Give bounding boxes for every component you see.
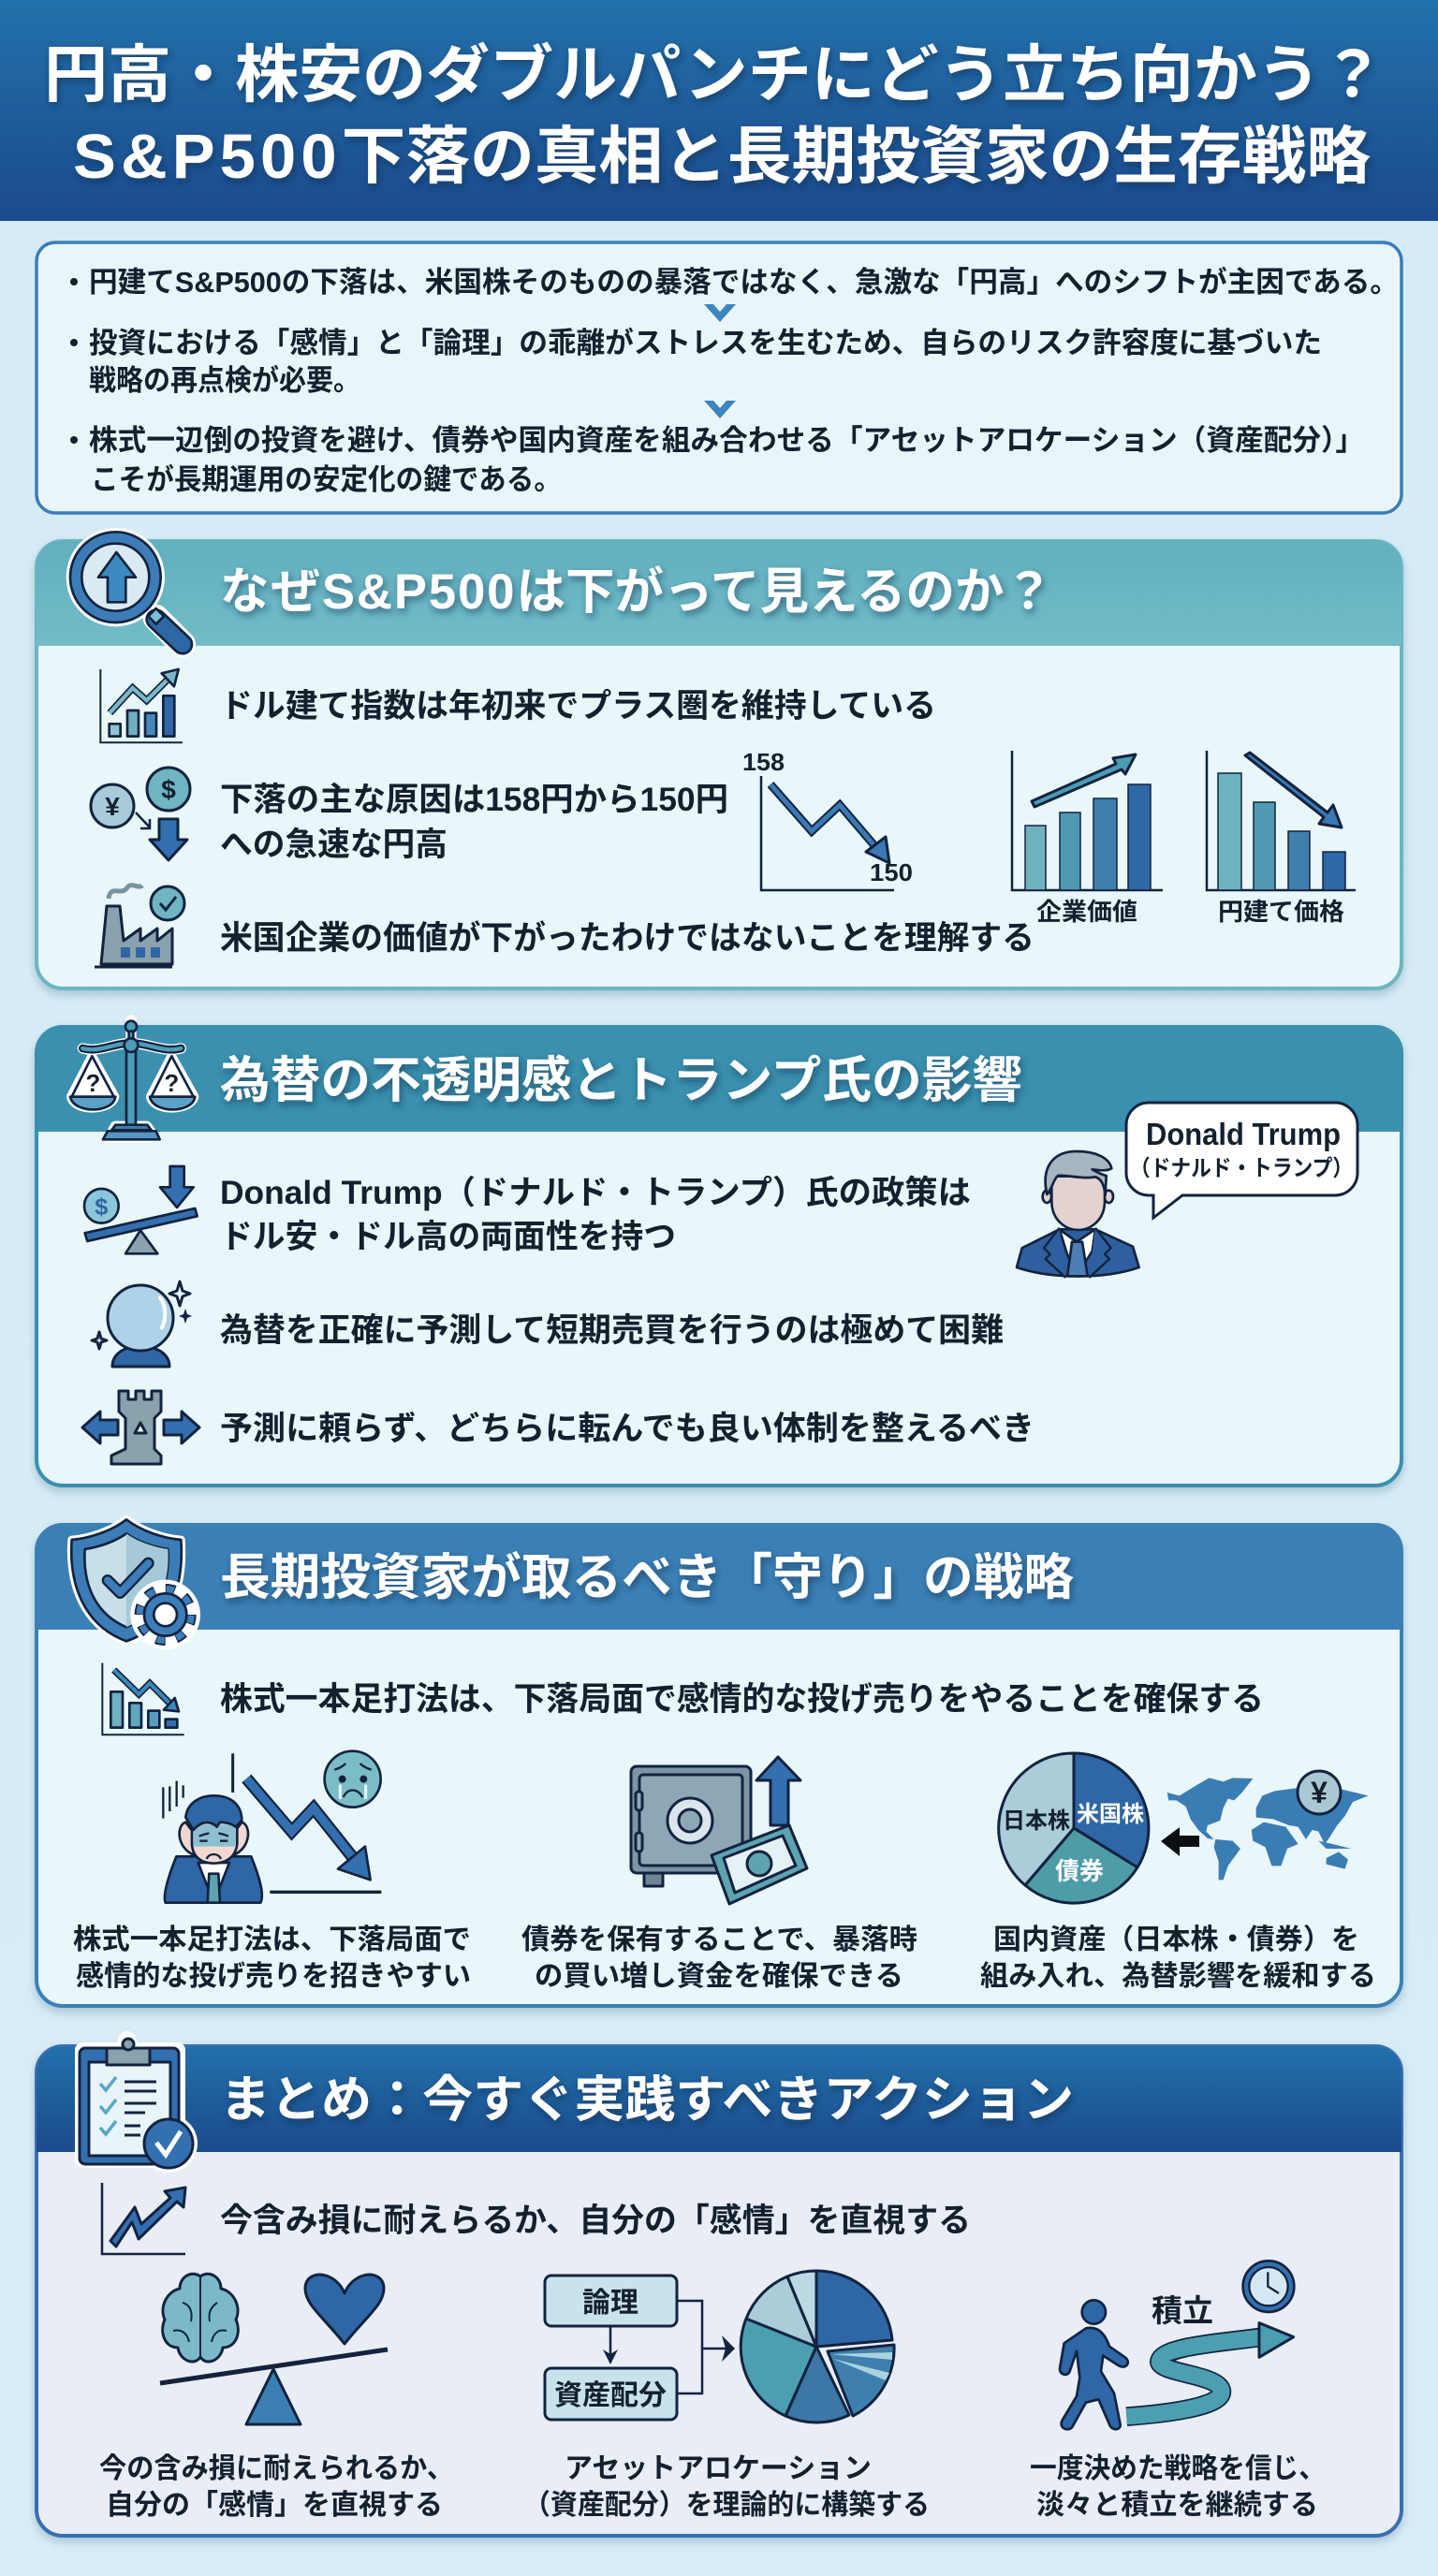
chart: yen-denominated price: 円建て価格	[1218, 898, 1344, 926]
row: difficult forecast	[92, 1281, 1004, 1367]
chart: USD/JPY 158 to 150	[742, 748, 913, 890]
summary point 3: 株式一辺倒の投資を避け、債券や国内資産を組み合わせる「アセットアロケーション（資産配分）」	[89, 424, 1364, 457]
caption: single-stock risk: 感情的な投げ売りを招きやすい	[76, 1961, 471, 1992]
caption: emotions: 自分の「感情」を直視する	[106, 2490, 443, 2521]
title: 円高・株安のダブルパンチにどう立ち向かう？	[44, 40, 1385, 110]
caption: keep investing: 一度決めた戦略を信じ、	[1030, 2453, 1326, 2484]
row: difficult forecast: 為替を正確に予測して短期売買を行うのは極めて困難	[220, 1312, 1004, 1349]
chart: yen-denominated price	[1207, 751, 1356, 926]
row: prepare for both: 予測に頼らず、どちらに転んでも良い体制を整えるべき	[220, 1411, 1034, 1447]
caption: emotions: 今の含み損に耐えられるか、	[99, 2453, 454, 2484]
heading: なぜS&P500は下がって見えるのか？	[220, 564, 1053, 620]
callout: Donald Trump speech bubble: Donald Trump	[1146, 1117, 1341, 1151]
row: Trump policy: Donald Trump（ドナルド・トランプ）氏の政策は	[220, 1175, 971, 1211]
summary point 2: 戦略の再点検が必要。	[89, 364, 360, 397]
caption: keep investing	[1030, 2453, 1326, 2521]
row: single-stock strategy	[102, 1663, 1264, 1734]
panel: summary actions	[37, 2031, 1401, 2536]
icon: scales: ?	[164, 1069, 179, 1097]
icon: magnifier	[66, 528, 183, 644]
panel: currency uncertainty and Trump	[37, 1020, 1401, 1486]
chart: asset mix pie: 債券	[1055, 1857, 1104, 1885]
icon: factory	[95, 886, 184, 967]
heading: まとめ：今すぐ実践すべきアクション	[220, 2072, 1074, 2128]
icon: currency exchange: $	[161, 775, 176, 804]
icon: world map with yen	[1167, 1771, 1369, 1880]
chart: asset mix pie: 米国株	[1077, 1802, 1144, 1827]
caption: single-stock risk	[73, 1925, 471, 1992]
title banner	[0, 0, 1438, 221]
panel: defensive strategy	[37, 1519, 1401, 2006]
caption: bonds: の買い増し資金を確保できる	[535, 1961, 903, 1992]
diagram: logic to allocation: 資産配分	[554, 2380, 667, 2411]
caption: keep investing: 淡々と積立を継続する	[1036, 2490, 1318, 2521]
icon: checklist clipboard	[75, 2031, 198, 2173]
row: dollar index: ドル建て指数は年初来でプラス圏を維持している	[220, 688, 936, 724]
illustration: safe, arrow and banknote	[631, 1757, 807, 1904]
row: dollar index	[100, 669, 936, 742]
icon: rising chart	[100, 669, 183, 742]
icon: shield with gear	[71, 1519, 200, 1649]
panel: why S&P500 looks lower	[37, 528, 1401, 988]
title	[44, 40, 1385, 192]
icon: currency exchange	[91, 768, 190, 860]
chart: company value	[1012, 751, 1163, 926]
caption: domestic assets	[980, 1925, 1376, 1992]
row: Trump policy	[84, 1166, 971, 1255]
title: S&P500下落の真相と長期投資家の生存戦略	[73, 122, 1371, 192]
row: company value: 米国企業の価値が下がったわけではないことを理解する	[220, 920, 1034, 957]
panel: summary	[37, 242, 1401, 513]
icon: world map with yen: ¥	[1311, 1776, 1328, 1809]
row: Trump policy: ドル安・ドル高の両面性を持つ	[220, 1219, 676, 1255]
callout: Donald Trump speech bubble: （ドナルド・トランプ）	[1130, 1156, 1353, 1181]
arrow: summary 1 to 2	[704, 304, 736, 322]
row: company value	[95, 886, 1034, 967]
caption: allocation: アセットアロケーション	[565, 2453, 872, 2484]
arrow: world into portfolio	[1161, 1827, 1199, 1856]
row: face emotions	[102, 2183, 971, 2254]
chart: allocation pie	[741, 2271, 894, 2422]
icon: Donald Trump portrait	[1017, 1151, 1139, 1278]
summary point 2: 投資における「感情」と「論理」の乖離がストレスを生むため、自らのリスク許容度に基づいた	[89, 327, 1322, 359]
chart: asset mix pie: 日本株	[1003, 1808, 1070, 1834]
chart: asset mix pie	[999, 1753, 1149, 1903]
row: single-stock strategy: 株式一本足打法は、下落局面で感情的な投げ売りをやることを確保する	[220, 1681, 1264, 1718]
arrow: summary 2 to 3	[704, 401, 736, 418]
illustration: brain and heart on seesaw	[160, 2274, 388, 2424]
heading: 長期投資家が取るべき「守り」の戦略	[220, 1550, 1074, 1605]
caption: bonds: 債券を保有することで、暴落時	[521, 1925, 917, 1955]
illustration: walker on path to clock	[1060, 2261, 1294, 2429]
icon: seesaw: $	[95, 1193, 108, 1220]
icon: scales	[70, 1020, 195, 1139]
icon: falling chart	[102, 1663, 184, 1734]
icon: tower with arrows	[82, 1391, 199, 1464]
summary point 3: こそが長期運用の安定化の鍵である。	[91, 463, 562, 496]
row: face emotions: 今含み損に耐えらるか、自分の「感情」を直視する	[220, 2203, 971, 2239]
illustration: worried investor and falling arrow	[163, 1751, 381, 1903]
chart: USD/JPY 158 to 150: 158	[742, 748, 785, 776]
caption: allocation: （資産配分）を理論的に構築する	[523, 2490, 930, 2521]
diagram: logic to allocation	[545, 2276, 735, 2420]
icon: crystal ball	[92, 1281, 192, 1367]
icon: rising arrow chart	[102, 2183, 185, 2254]
chart: USD/JPY 158 to 150: 150	[870, 858, 913, 886]
summary point 1: 円建てS&P500の下落は、米国株そのものの暴落ではなく、急激な「円高」へのシフトが主因である。	[89, 266, 1399, 299]
caption: domestic assets: 国内資産（日本株・債券）を	[993, 1925, 1359, 1955]
row: prepare for both	[82, 1391, 1034, 1464]
caption: bonds	[521, 1925, 917, 1992]
caption: allocation	[523, 2453, 930, 2521]
icon: scales: ?	[85, 1069, 100, 1097]
row: yen appreciation	[91, 768, 728, 863]
callout: Donald Trump speech bubble	[1126, 1103, 1357, 1218]
caption: emotions	[99, 2453, 454, 2521]
diagram: logic to allocation: 論理	[582, 2288, 638, 2319]
caption: single-stock risk: 株式一本足打法は、下落局面で	[73, 1925, 471, 1955]
row: yen appreciation: への急速な円高	[220, 827, 448, 863]
illustration: walker on path to clock: 積立	[1152, 2293, 1213, 2328]
summary point 3	[70, 424, 1364, 496]
heading: 為替の不透明感とトランプ氏の影響	[220, 1053, 1022, 1108]
row: yen appreciation: 下落の主な原因は158円から150円	[220, 782, 728, 818]
chart: company value: 企業価値	[1036, 898, 1137, 926]
summary point 2	[70, 327, 1322, 397]
caption: domestic assets: 組み入れ、為替影響を緩和する	[980, 1961, 1376, 1992]
icon: seesaw	[84, 1166, 198, 1253]
icon: currency exchange: ¥	[105, 792, 120, 821]
